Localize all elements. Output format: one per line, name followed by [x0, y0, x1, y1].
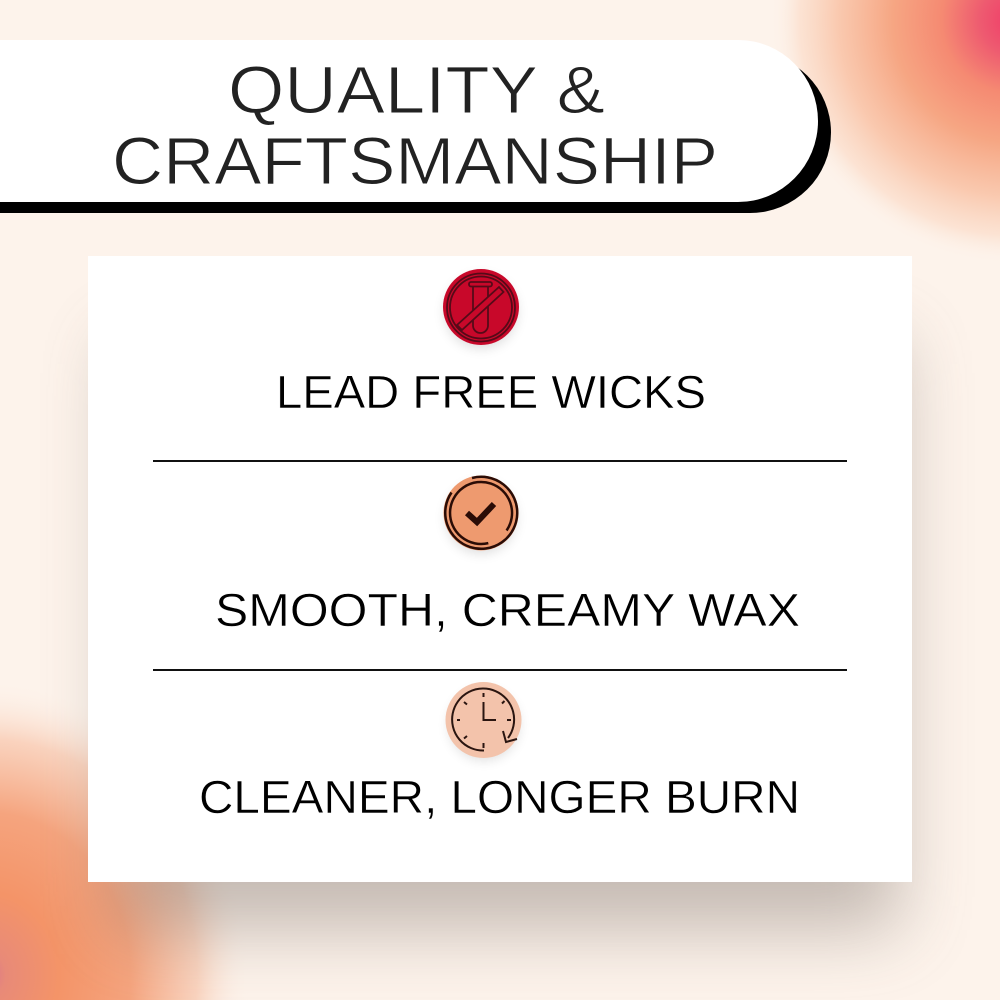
- title banner: [0, 40, 831, 213]
- panel: features card: [88, 256, 912, 882]
- card shadow: [115, 340, 900, 930]
- label: smooth, creamy wax: SMOOTH, CREAMY WAX: [215, 584, 800, 636]
- gradient blob: bottom left: [0, 680, 260, 1000]
- banner shadow: [0, 52, 831, 213]
- label: lead free wicks: LEAD FREE WICKS: [276, 366, 706, 418]
- gradient blob: top right: [740, 0, 1000, 280]
- title: CRAFTSMANSHIP: [112, 124, 718, 199]
- title: [112, 53, 718, 199]
- title: QUALITY &: [228, 53, 605, 128]
- icon: check mark: [444, 476, 518, 553]
- icon: clock: [446, 682, 522, 760]
- icon: no test tube: [443, 269, 519, 348]
- label: cleaner, longer burn: CLEANER, LONGER BURN: [199, 771, 800, 823]
- banner pill: [0, 40, 818, 202]
